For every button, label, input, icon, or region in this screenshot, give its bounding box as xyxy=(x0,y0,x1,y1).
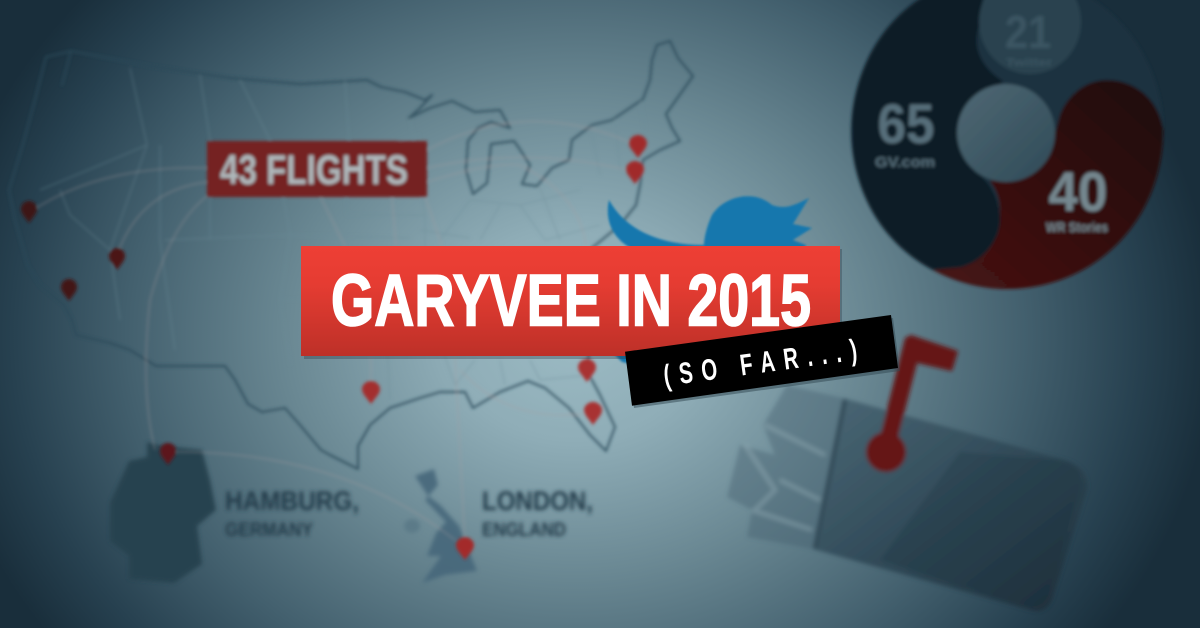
stat: 21: 21 xyxy=(1005,6,1051,58)
title banner xyxy=(301,246,842,359)
map pins xyxy=(21,135,647,560)
stat: 65: GV.com xyxy=(875,154,935,171)
subtitle tag xyxy=(625,315,900,408)
US map outline xyxy=(9,41,693,469)
donut chart xyxy=(851,0,1163,289)
label: London: ENGLAND xyxy=(482,520,566,541)
navy segment 65 xyxy=(852,0,1003,270)
mailbox door edge xyxy=(815,400,845,548)
label: Hamburg xyxy=(225,486,359,541)
mail folds xyxy=(745,425,825,530)
callout: 43 flights: 43 FLIGHTS xyxy=(220,146,408,193)
title text: GARYVEE IN 2015 xyxy=(331,260,811,342)
icon: twitter bird xyxy=(608,196,812,366)
mailbox body xyxy=(813,398,1087,611)
mailbox flag xyxy=(878,335,958,445)
UK shape xyxy=(415,469,477,583)
mailbox flag pivot xyxy=(866,432,906,472)
icon: mailbox xyxy=(727,335,1087,611)
Ireland shape xyxy=(404,519,420,533)
center hole xyxy=(957,84,1055,182)
label: London xyxy=(482,486,593,541)
Germany shape xyxy=(110,442,216,583)
donut base ring xyxy=(851,0,1163,289)
blurred Europe map xyxy=(110,442,593,583)
stat: 21: Twitter xyxy=(1006,57,1053,69)
stat: 65: 65 xyxy=(878,92,934,155)
label: Hamburg: GERMANY xyxy=(225,520,313,541)
label: London: LONDON, xyxy=(482,486,593,516)
state borders xyxy=(40,68,645,400)
blurred US flight map xyxy=(9,41,693,560)
stat: 40: 40 xyxy=(1048,160,1108,223)
label: Hamburg: HAMBURG, xyxy=(225,486,359,516)
stat: 40: WR Stories xyxy=(1046,219,1108,235)
grey segment 21 xyxy=(979,0,1081,74)
flight arcs xyxy=(30,121,638,545)
mail envelopes xyxy=(727,385,843,549)
subtitle text: (SO FAR...) xyxy=(662,333,868,393)
red segment 40 xyxy=(933,80,1163,289)
mailbox panel xyxy=(880,452,1080,606)
